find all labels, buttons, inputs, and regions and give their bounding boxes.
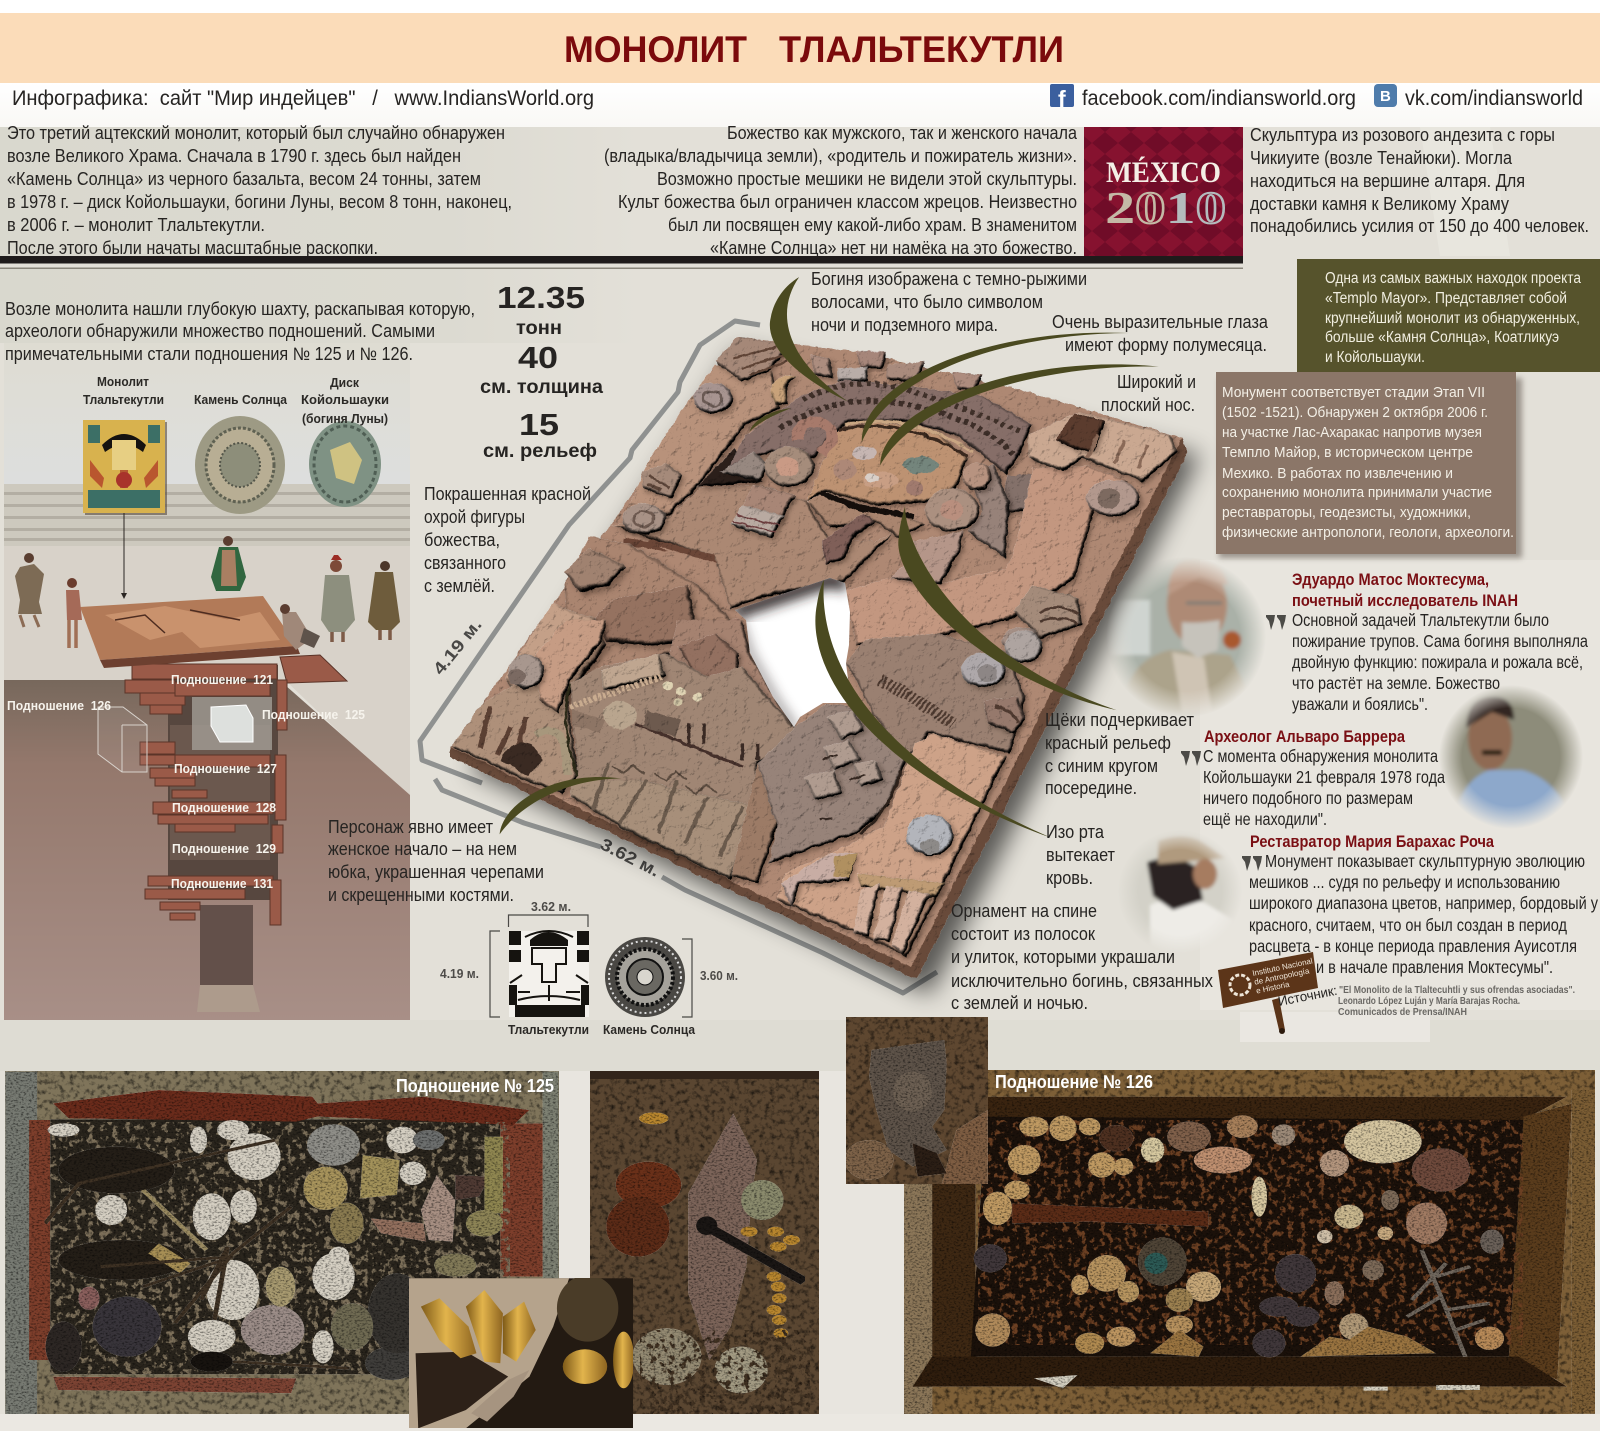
photo: offering 126 sculpture (845, 1017, 988, 1184)
panel: brown note: Темпло Майор, в историческом центре (1222, 445, 1473, 461)
callout: cheeks text: посередине. (1045, 778, 1137, 798)
intro text: deity: Возможно простые мешики не видели этой скульптуры. (657, 169, 1077, 189)
slab base (451, 337, 1188, 978)
stats: см. рельеф (483, 441, 597, 462)
callout: blood text: вытекает (1046, 845, 1115, 865)
intro text: third monolith: «Камень Солнца» из черного базальта, весом 24 тонны, затем (7, 169, 481, 189)
stones (307, 1124, 360, 1166)
callout: ornament text: исключительно богинь, связанных (951, 971, 1213, 991)
callout: skirt (500, 777, 621, 834)
panel: brown note: физические антропологи, геологи, археологи. (1222, 525, 1514, 541)
dimension: height: 4.19 м. (429, 615, 486, 679)
intro text: third monolith: После этого были начаты масштабные раскопки. (7, 238, 378, 258)
callout: eyes text (1052, 312, 1269, 355)
photo label: offering 125: Подношение № 125 (396, 1075, 554, 1096)
callout: hair (770, 277, 848, 401)
panel: olive note: больше «Камня Солнца», Коатликуэ (1325, 329, 1559, 346)
callout: ochre text: Покрашенная красной (424, 484, 591, 504)
headdress band (728, 380, 1032, 475)
coral (1407, 1250, 1489, 1357)
dimension outline (420, 321, 937, 993)
photo: middle offering (590, 1071, 819, 1414)
text: shaft intro (5, 299, 475, 341)
callout: hair text: волосами, что было символом (811, 292, 1043, 312)
flint blade (688, 1113, 757, 1360)
labels: monuments: (богиня Луны) (302, 412, 388, 426)
labels: offerings: Подношение 128 (172, 800, 276, 815)
credits strip: Инфографика: сайт "Мир индейцев" / www.IndiansWorld.org (12, 87, 594, 110)
callout: cheeks text (1045, 710, 1194, 798)
dimension: width: 3.62 м. (597, 835, 663, 881)
photo: offering 125 (5, 1071, 559, 1415)
size comparison diagram: Камень Солнца (603, 1023, 696, 1037)
callout curves (500, 277, 1159, 838)
divider bar (0, 256, 1243, 269)
intro text: deity: Божество как мужского, так и женского начала (727, 123, 1078, 143)
photo label: offering 126: Подношение № 126 (995, 1071, 1153, 1092)
stats (480, 280, 603, 462)
text: shaft intro: Возле монолита нашли глубокую шахту, раскапывая которую, (5, 299, 475, 319)
callout: cheeks text: с синим кругом (1045, 756, 1158, 776)
stone body (451, 337, 1188, 978)
dark carved objects (974, 1244, 1319, 1357)
callout: ochre text: божества, (424, 530, 500, 550)
shadow (470, 350, 1200, 995)
quote: Matos Moctezuma: что растёт на земле. Божество (1292, 673, 1500, 693)
callout: hair text: ночи и подземного мира. (811, 315, 998, 335)
icon: facebook (1050, 84, 1074, 112)
quote: Barajas: Реставратор Мария Барахас Роча (1250, 833, 1495, 851)
quote: Barrera: Койольшауки 21 февраля 1978 года (1203, 767, 1445, 787)
stats: тонн (516, 318, 562, 339)
brick courses (125, 655, 347, 925)
callout: skirt text: Персонаж явно имеет (328, 817, 493, 837)
labels: monuments: Диск (330, 376, 360, 390)
callout: skirt text: юбка, украшенная черепами (328, 862, 544, 882)
intro text: deity: «Камне Солнца» нет ни намёка на это божество. (710, 238, 1077, 258)
sign: INAH: de Antropología (1253, 966, 1311, 987)
quote: Matos Moctezuma: уважали и боялись". (1292, 694, 1428, 714)
credits strip: facebook.com/indiansworld.org (1082, 87, 1356, 110)
shell clusters (633, 1328, 701, 1385)
icon: vk: В (1380, 88, 1391, 105)
callout: nose text: Широкий и (1117, 372, 1196, 392)
callout: ochre text: связанного (424, 553, 506, 573)
offering 125 box (192, 697, 272, 750)
labels: offerings: Подношение 121 (171, 672, 273, 687)
face (807, 422, 967, 505)
callout: nose text: плоский нос. (1101, 395, 1195, 415)
comb (1012, 1203, 1208, 1227)
callout: ornament text: Орнамент на спине (951, 901, 1097, 921)
hole (735, 578, 850, 727)
panel: olive note: «Templo Mayor». Представляет собой (1325, 290, 1567, 307)
panel: olive note: и Койольшауки. (1325, 349, 1425, 366)
source note: Источник: (1277, 983, 1338, 1009)
panel: brown note: Монумент соответствует стадии Этап VII (1222, 385, 1485, 401)
callout: nose (880, 364, 1159, 465)
line-art monolith (509, 931, 589, 1017)
badge: Mexico 2010 (1084, 127, 1243, 256)
callout: blood text (1046, 822, 1115, 888)
intro text: third monolith (7, 123, 512, 258)
labels: monuments: Тлальтекутли (83, 393, 164, 407)
monolith relief (451, 277, 1200, 995)
intro text: third monolith: возле Великого Храма. Сначала в 1790 г. здесь был найден (7, 146, 461, 166)
callout: ochre text (424, 484, 591, 596)
portrait: Matos Moctezuma (1110, 560, 1262, 714)
photo: gold bells (409, 1275, 634, 1428)
labels: offerings: Подношение 125 (262, 707, 365, 722)
stats: 15 (519, 407, 559, 442)
pot (1138, 1238, 1187, 1286)
dark objects (93, 1297, 161, 1357)
intro text: third monolith: Это третий ацтекский монолит, который был случайно обнаружен (7, 123, 505, 143)
labels: offerings (7, 672, 365, 891)
clay heads (616, 1162, 681, 1208)
shaft (168, 665, 278, 1012)
callout: skirt text: женское начало – на нем (328, 839, 517, 859)
labels: offerings: Подношение 129 (172, 841, 276, 856)
upper half relief (611, 337, 1178, 653)
callout: ornament text: состоит из полосок (951, 924, 1095, 944)
callout: ornament text: и улиток, которыми украшали (951, 947, 1175, 967)
pale debris on sill (1034, 1375, 1480, 1391)
shells (48, 1120, 426, 1363)
credits strip (0, 83, 1600, 127)
offering 126 ghost box (98, 707, 147, 772)
ornament details (634, 347, 1147, 625)
callout: eyes text: Очень выразительные глаза (1052, 312, 1269, 332)
quote: Matos Moctezuma: Основной задачей Тлальтекутли было (1292, 610, 1549, 630)
callout: blood text: кровь. (1046, 868, 1093, 888)
labels: offerings: Подношение 131 (171, 876, 273, 891)
middle relief (505, 536, 748, 706)
intro text: deity: был ли посвящен ему какой-либо храм. В знаменитом (668, 215, 1077, 235)
photo: offering 126 (903, 1070, 1596, 1417)
intro text: third monolith: в 2006 г. – монолит Тлальтекутли. (7, 215, 265, 235)
arrow (121, 513, 127, 599)
icon: quote marks (1242, 856, 1262, 871)
sticks (45, 1140, 349, 1368)
source note (1277, 983, 1575, 1018)
badge: Mexico 2010: 2010 (1105, 182, 1226, 233)
callout: cheeks text: Щёки подчеркивает (1045, 710, 1194, 730)
quote: Barrera: ещё не находили". (1203, 809, 1327, 829)
badge: Mexico 2010: MÉXICO (1106, 156, 1221, 189)
sign: INAH: e Historia (1255, 980, 1291, 996)
source note: Leonardo López Luján y María Barajas Rocha. (1338, 995, 1520, 1007)
intro text: third monolith: в 1978 г. – диск Койольшауки, богини Луны, весом 8 тонн, наконец, (7, 192, 512, 212)
intro text: deity: (владыка/владычица земли), «родитель и пожиратель жизни». (604, 146, 1077, 166)
panel: brown note: на участке Лас-Ахаракас напротив музея (1222, 425, 1482, 441)
labels: monuments (83, 375, 389, 426)
portrait: Barajas (1128, 835, 1234, 943)
icon: quote marks (1181, 751, 1201, 766)
sign: INAH (1218, 952, 1318, 1034)
callout: nose text (1101, 372, 1196, 415)
title band: ТЛАЛЬТЕКУТЛИ (779, 29, 1064, 70)
labels: monuments: Камень Солнца (194, 393, 288, 407)
quote: Barrera: ничего подобного по размерам (1203, 788, 1413, 808)
callout: ornament text (951, 901, 1213, 1013)
callout: blood text: Изо рта (1046, 822, 1105, 842)
title band: МОНОЛИТ (564, 29, 747, 70)
callout: ochre text: охрой фигуры (424, 507, 525, 527)
quote: Barajas (1242, 833, 1598, 977)
quote: Matos Moctezuma (1266, 571, 1588, 714)
panel: brown note: Мехико. В работах по извлечению и (1222, 466, 1453, 482)
lower half relief (451, 620, 1043, 957)
icon: vk (1374, 84, 1397, 107)
callout: ochre (749, 408, 791, 432)
disc (741, 1180, 784, 1220)
stats: см. толщина (480, 377, 603, 398)
title band (0, 0, 1600, 83)
sign: INAH: Instituto Nacional (1252, 956, 1314, 978)
quote: Barajas: и в начале правления Моктесумы". (1316, 957, 1553, 977)
plaque: Tlaltecuhtli (83, 420, 167, 515)
icon: facebook: f (1058, 86, 1066, 112)
size comparison diagram: 3.60 м. (700, 969, 738, 983)
size comparison diagram: 4.19 м. (440, 967, 479, 981)
panel: brown note (1216, 372, 1522, 558)
stats: 12.35 (497, 280, 585, 315)
tool (704, 1225, 805, 1282)
labels: offerings: Подношение 127 (174, 761, 277, 776)
moon disc (309, 421, 381, 507)
text: andesite sculpture: Скульптура из розового андезита с горы (1250, 125, 1555, 145)
callout: hair text (811, 269, 1087, 335)
labels: monuments: Монолит (97, 375, 149, 389)
size comparison diagram: 3.62 м. (531, 900, 571, 914)
callout: skirt text: и скрещенными костями. (328, 885, 514, 905)
sun stone (195, 416, 285, 514)
gold beads (639, 1112, 800, 1338)
callout: cheeks (898, 506, 1116, 710)
panel: brown note: сохранению монолита принимали участие (1222, 485, 1492, 501)
callout: hair text: Богиня изображена с темно-рыжими (811, 269, 1087, 289)
quote: Barrera (1181, 728, 1445, 829)
labels: offerings: Подношение 126 (7, 698, 111, 713)
labels: monuments: Койольшауки (301, 393, 389, 407)
source note: Comunicados de Prensa/INAH (1338, 1006, 1467, 1018)
panel: brown note: (1502 -1521). Обнаружен 2 октября 2006 г. (1222, 405, 1488, 421)
people (15, 536, 400, 650)
text: andesite sculpture: доставки камня к Великому Храму (1250, 194, 1509, 214)
callout: ochre text: с землёй. (424, 576, 495, 596)
stats: 40 (518, 340, 558, 375)
callout: cheeks text: красный рельеф (1045, 733, 1171, 753)
size comparison diagram: Тлальтекутли (508, 1023, 589, 1037)
text: andesite sculpture: находиться на вершине алтаря. Для (1250, 171, 1525, 191)
line-art sun stone (605, 937, 685, 1017)
intro text: deity (604, 123, 1078, 258)
text: andesite sculpture (1250, 125, 1589, 236)
panel: brown note: реставраторы, геодезисты, художники, (1222, 505, 1471, 521)
small monolith model (80, 596, 300, 668)
quote: Barrera: Археолог Альваро Баррера (1204, 728, 1406, 746)
panel: excavation cross-section (4, 343, 410, 1020)
callout: eyes text: имеют форму полумесяца. (1065, 335, 1267, 355)
text: offerings line over panel: примечательными стали подношения № 125 и № 126. (5, 344, 413, 364)
brick ledge (53, 1090, 529, 1125)
callout: skirt text (328, 817, 544, 905)
quote: Matos Moctezuma: почетный исследователь INAH (1292, 592, 1518, 610)
quote: Matos Moctezuma: Эдуардо Матос Моктесума, (1292, 571, 1489, 589)
panel: olive note (1297, 259, 1600, 372)
offerings: pale and tan pieces (975, 1115, 1504, 1357)
callout: eyes (862, 333, 1129, 442)
intro text: deity: Культ божества был ограничен классом жрецов. Неизвестно (618, 192, 1077, 212)
icon: quote marks (1266, 615, 1286, 630)
portrait: Barrera (1441, 687, 1581, 827)
callout: ornament text: с землей и ночью. (951, 993, 1088, 1013)
credits strip: vk.com/indiansworld (1405, 87, 1583, 110)
text: shaft intro: археологи обнаружили множество подношений. Самыми (5, 321, 435, 341)
icon: INAH emblem (1230, 975, 1250, 995)
text: andesite sculpture: Чикиуите (возле Тенайюки). Могла (1250, 148, 1513, 168)
right arm (845, 465, 1128, 645)
callout: mouth blood (815, 580, 1051, 838)
size comparison diagram (440, 900, 738, 1037)
dark pit (971, 1117, 1523, 1357)
quote: Barrera: С момента обнаружения монолита (1203, 746, 1438, 766)
